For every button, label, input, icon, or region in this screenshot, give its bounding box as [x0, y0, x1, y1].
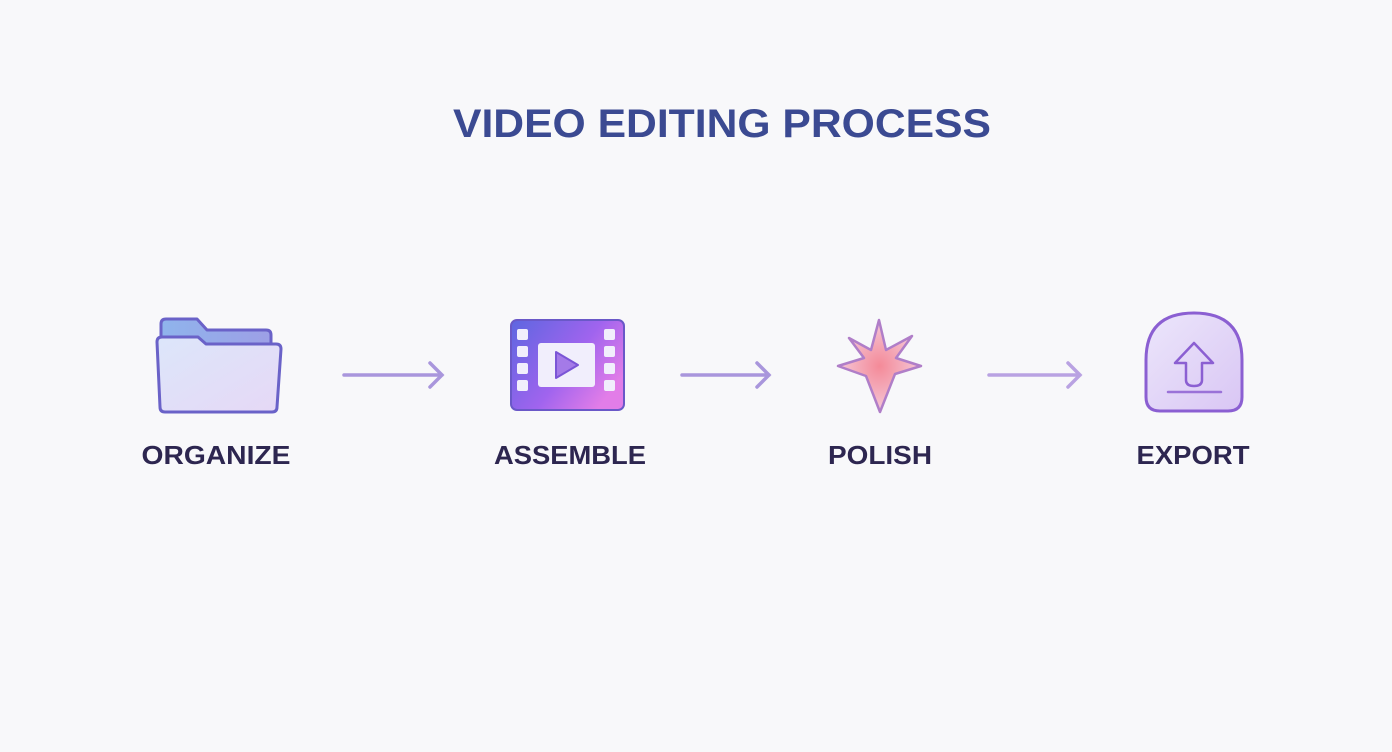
icon: film strip	[511, 320, 624, 410]
step: assemble	[494, 320, 646, 470]
icon: folder	[157, 319, 281, 412]
arrow 2	[682, 363, 769, 387]
icon: export box	[1146, 313, 1242, 411]
label: assemble: ASSEMBLE	[494, 440, 646, 470]
arrow 1	[344, 363, 442, 387]
label: export: EXPORT	[1136, 440, 1250, 470]
title: VIDEO EDITING PROCESS	[453, 102, 991, 146]
label: organize: ORGANIZE	[142, 440, 290, 470]
label: polish: POLISH	[828, 440, 932, 470]
step: polish	[828, 320, 932, 470]
step: export	[1136, 313, 1250, 470]
arrow 3	[989, 363, 1080, 387]
icon: sparkle star	[838, 320, 921, 412]
step: organize	[142, 319, 290, 470]
